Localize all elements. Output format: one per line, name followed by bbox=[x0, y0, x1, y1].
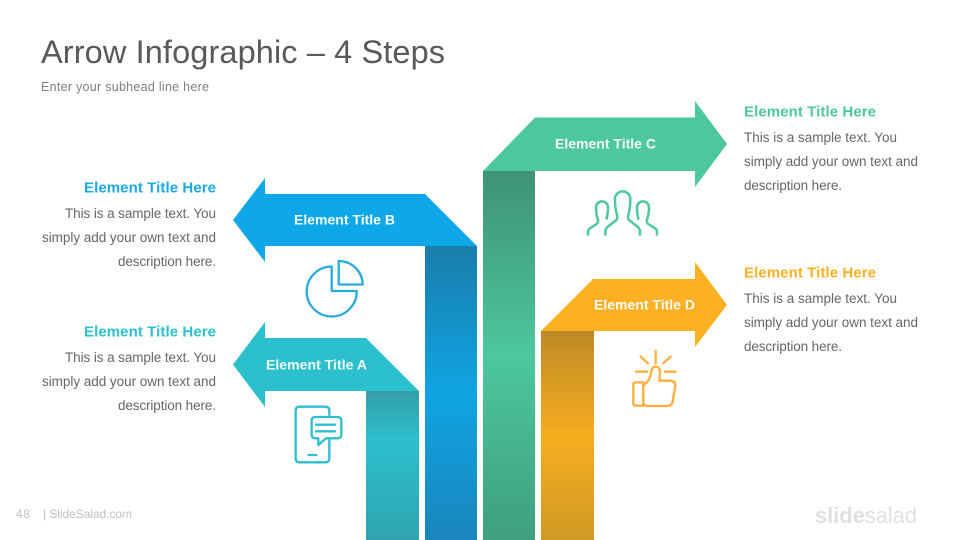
text block: B bbox=[42, 180, 216, 269]
body B: This is a sample text. You bbox=[65, 206, 216, 221]
body A bbox=[42, 350, 216, 413]
body D: simply add your own text and bbox=[744, 315, 918, 330]
heading C: Element Title Here bbox=[744, 104, 876, 120]
body C bbox=[744, 130, 918, 193]
text block: A bbox=[42, 324, 216, 413]
body A: description here. bbox=[118, 398, 216, 413]
arrow A label: Element Title A bbox=[266, 356, 367, 372]
text block: C bbox=[744, 104, 918, 193]
heading B: Element Title Here bbox=[84, 180, 216, 196]
arrow D head bbox=[541, 262, 727, 347]
arrow D label: Element Title D bbox=[594, 296, 695, 312]
icon: phone with speech bubble bbox=[296, 407, 341, 462]
heading D: Element Title Here bbox=[744, 264, 876, 282]
subhead: Enter your subhead line here bbox=[41, 80, 209, 94]
body B: simply add your own text and bbox=[42, 230, 216, 245]
footer source: | SlideSalad.com bbox=[43, 507, 132, 521]
arrow C head bbox=[483, 101, 727, 187]
arrow C bbox=[483, 101, 727, 540]
body D bbox=[744, 291, 918, 354]
page number: 48 bbox=[16, 507, 30, 521]
body D: description here. bbox=[744, 339, 842, 354]
body C: This is a sample text. You bbox=[744, 130, 897, 145]
heading A: Element Title Here bbox=[84, 324, 216, 340]
body B bbox=[42, 206, 216, 269]
arrow B label: Element Title B bbox=[294, 212, 395, 228]
text block: D bbox=[744, 264, 918, 354]
icon: thumbs up bbox=[633, 351, 676, 406]
icon: three people bbox=[588, 191, 657, 236]
body D: This is a sample text. You bbox=[744, 291, 897, 306]
arrow C column bbox=[483, 171, 535, 540]
body C: simply add your own text and bbox=[744, 154, 918, 169]
arrow B bbox=[233, 178, 477, 540]
arrow C label: Element Title C bbox=[555, 136, 656, 152]
arrow B head bbox=[233, 178, 477, 262]
arrow A column bbox=[366, 391, 419, 540]
icon: pie chart bbox=[307, 261, 363, 316]
body A: simply add your own text and bbox=[42, 374, 216, 389]
body A: This is a sample text. You bbox=[65, 350, 216, 365]
body C: description here. bbox=[744, 178, 842, 193]
arrow A bbox=[233, 322, 419, 540]
title: Arrow Infographic – 4 Steps bbox=[41, 34, 445, 70]
arrow B column bbox=[425, 246, 477, 540]
body B: description here. bbox=[118, 254, 216, 269]
arrow A head bbox=[233, 322, 419, 407]
logo wordmark: slidesalad bbox=[815, 503, 917, 528]
arrow D bbox=[541, 262, 727, 540]
arrow D column bbox=[541, 331, 594, 540]
